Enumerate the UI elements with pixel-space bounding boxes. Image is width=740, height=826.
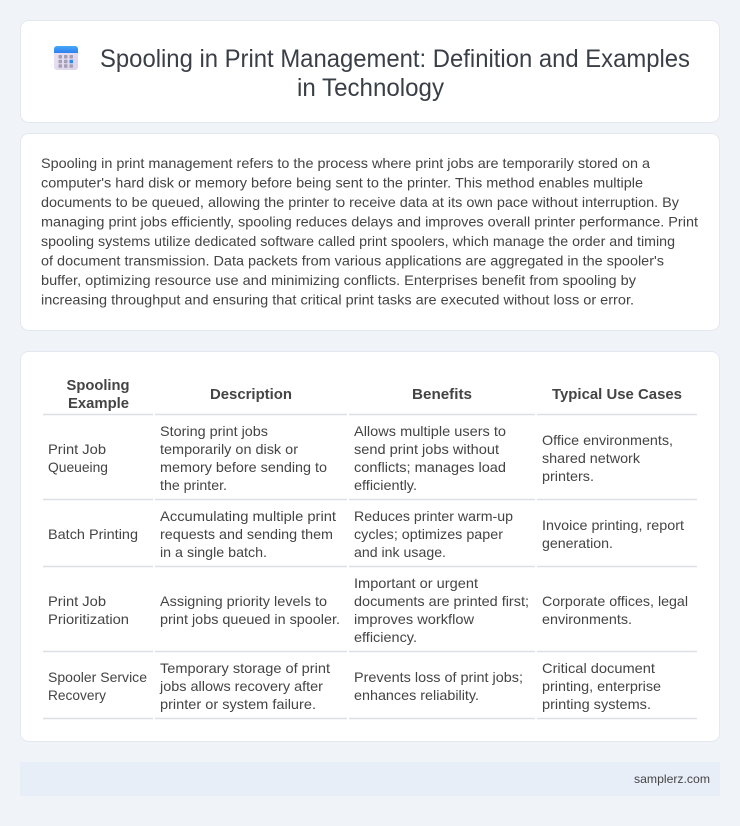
table row: print job queueing: shared network <box>542 450 641 466</box>
table row: spooler service recovery: Temporary storage of print <box>160 660 330 676</box>
icon: calendar grid <box>54 46 78 70</box>
table header: Typical Use Cases <box>552 386 682 403</box>
text block: definition: buffer, optimizing resource use and minimizing conflicts. Enterprises benefit from spooling by <box>41 272 636 288</box>
footer source text: samplerz.com <box>634 772 710 786</box>
table row: batch printing: generation. <box>542 535 613 551</box>
table row: spooler service recovery: Spooler Service <box>48 669 147 685</box>
table row: spooler service recovery <box>48 660 661 712</box>
table row: print job queueing: Storing print jobs <box>160 423 268 439</box>
panel: definition paragraph <box>20 134 720 330</box>
table row: batch printing: Accumulating multiple print <box>160 508 336 524</box>
table row: print job prioritization: print jobs queued in spooler. <box>160 611 340 627</box>
table row: print job queueing: the printer. <box>160 477 227 493</box>
table row: batch printing: Invoice printing, report <box>542 517 684 533</box>
table row: batch printing: Batch Printing <box>48 526 138 542</box>
table row: batch printing: requests and sending them <box>160 526 333 542</box>
table row: spooler service recovery: Recovery <box>48 687 106 703</box>
text block: definition: spooling systems utilize dedicated software called print spoolers, which manage the order and timing <box>41 233 675 249</box>
table row: spooler service recovery: printing systems. <box>542 696 651 712</box>
text block: definition: documents to be queued, allowing the printer to receive data at its own pace without interruption. By <box>41 194 679 210</box>
title <box>100 45 690 102</box>
table row: print job prioritization: Print Job <box>48 593 106 609</box>
table row: spooler service recovery: printer or system failure. <box>160 696 316 712</box>
text block: definition: of document transmission. Data packets from various applications are aggregated in the spooler's <box>41 252 664 268</box>
table row: print job prioritization: Assigning priority levels to <box>160 593 327 609</box>
table row: print job queueing: memory before sending to <box>160 459 327 475</box>
table row: spooler service recovery: Critical document <box>542 660 655 676</box>
panel: title card <box>20 20 720 122</box>
table row: batch printing: Reduces printer warm-up <box>354 508 513 524</box>
text block: definition: increasing throughput and ensuring that critical print tasks are executed without loss or error. <box>41 292 634 308</box>
table row: print job queueing: Allows multiple users to <box>354 423 506 439</box>
table row: print job queueing: send print jobs without <box>354 441 499 457</box>
footer bar <box>20 762 720 796</box>
table header: Spooling <box>66 377 130 394</box>
table row: print job prioritization: Corporate offices, legal <box>542 593 688 609</box>
table row: print job prioritization: Important or urgent <box>354 575 478 591</box>
text block: definition: computer's hard disk or memory before being sent to the printer. This method enables multiple <box>41 174 643 190</box>
table row: print job prioritization: efficiency. <box>354 629 417 645</box>
table row: batch printing <box>48 508 684 560</box>
table row: print job queueing: printers. <box>542 468 594 484</box>
table header: Benefits <box>412 386 472 403</box>
table row: print job prioritization <box>48 575 688 645</box>
text block: definition: managing print jobs efficiently, spooling reduces delays and improves overall printer performance. Print <box>41 214 698 230</box>
table row: print job queueing: efficiently. <box>354 477 417 493</box>
table row: batch printing: cycles; optimizes paper <box>354 526 503 542</box>
text block: definition: Spooling in print management refers to the process where print jobs are temporarily stored on a <box>41 155 650 171</box>
table row: print job prioritization: improves workflow <box>354 611 475 627</box>
table row: print job queueing: Office environments, <box>542 432 673 448</box>
panel: spooling examples table <box>20 352 720 742</box>
table row: spooler service recovery: Prevents loss of print jobs; <box>354 669 523 685</box>
table row: print job queueing: Print Job <box>48 441 106 457</box>
table row: print job queueing: Queueing <box>48 459 108 475</box>
table row: spooler service recovery: jobs allows recovery after <box>159 678 323 694</box>
table row: print job queueing: temporarily on disk or <box>160 441 298 457</box>
table row: spooler service recovery: enhances reliability. <box>354 687 479 703</box>
table row: print job prioritization: documents are printed first; <box>354 593 529 609</box>
table row: spooler service recovery: printing, enterprise <box>542 678 661 694</box>
title: in Technology <box>297 74 444 102</box>
table row: print job prioritization: environments. <box>542 611 632 627</box>
table row: batch printing: in a single batch. <box>160 544 267 560</box>
table row: print job queueing: conflicts; manages load <box>354 459 506 475</box>
table row: batch printing: and ink usage. <box>354 544 446 560</box>
table header: Example <box>68 395 129 412</box>
title: Spooling in Print Management: Definition and Examples <box>100 45 690 73</box>
table row: print job prioritization: Prioritization <box>48 611 129 627</box>
text block: definition <box>41 155 698 308</box>
table header: Description <box>210 386 292 403</box>
table row: print job queueing <box>48 423 673 493</box>
table header <box>66 377 682 412</box>
